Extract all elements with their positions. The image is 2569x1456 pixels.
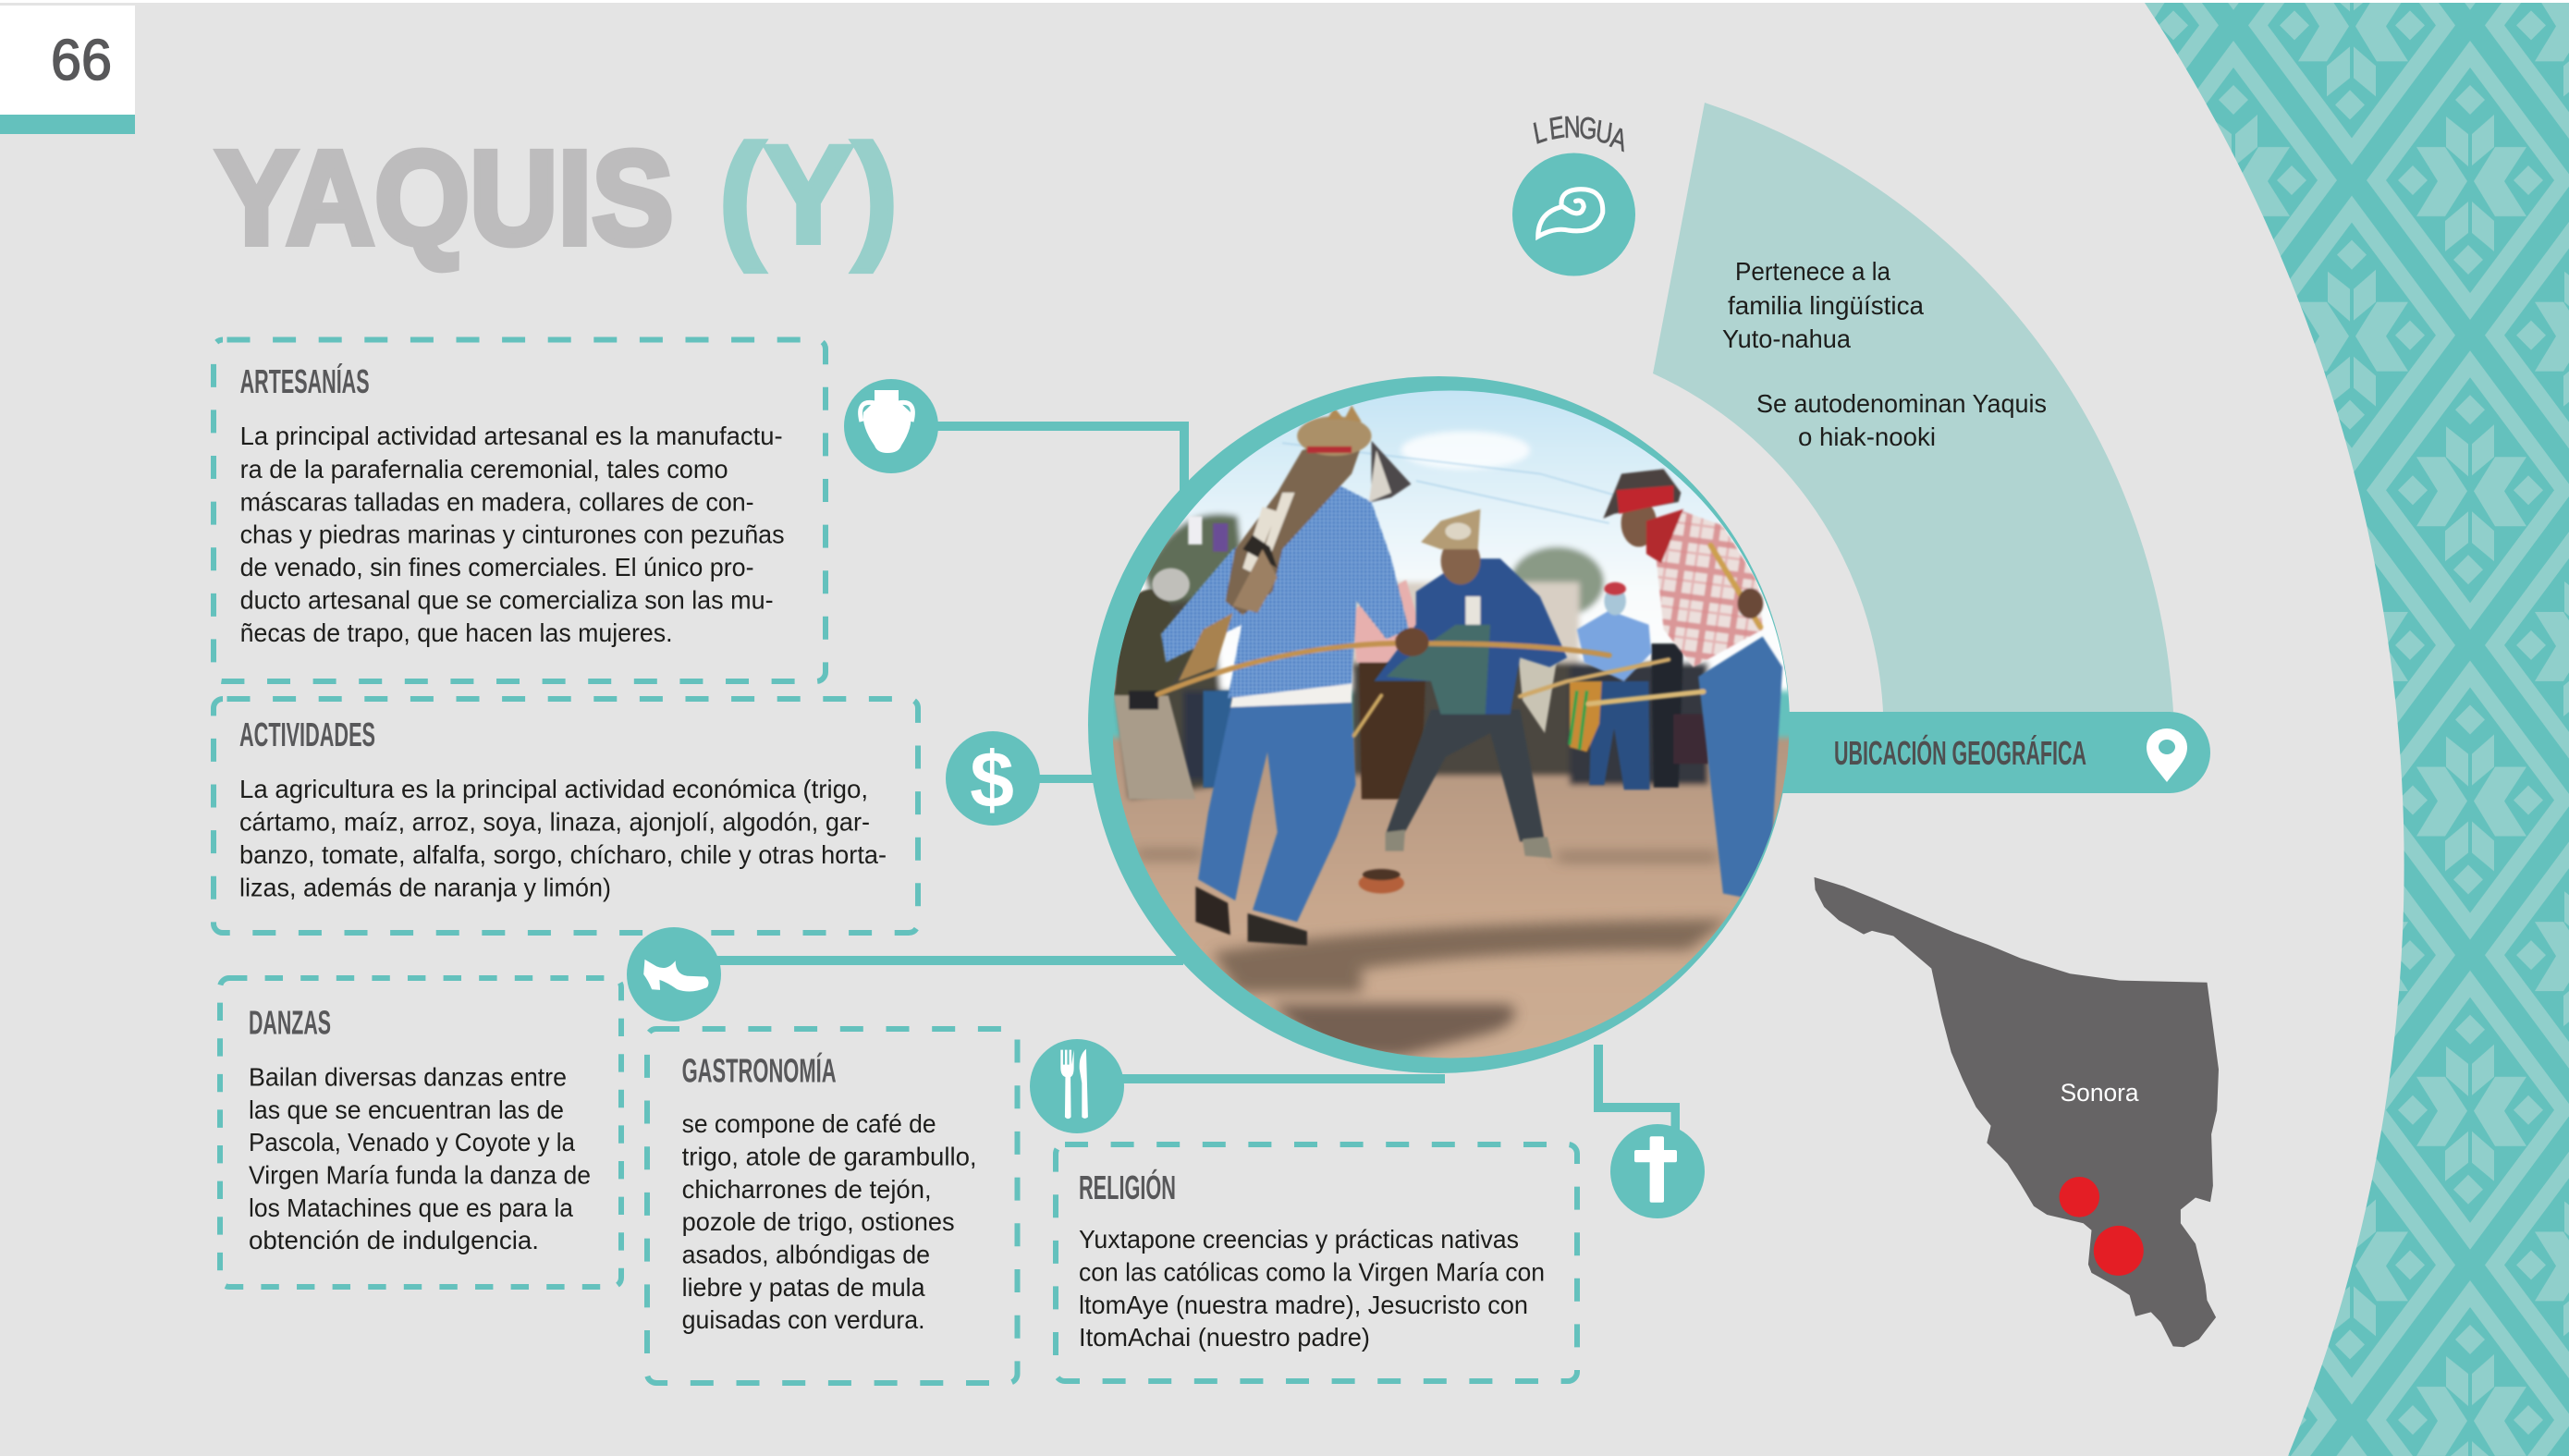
lengua text — [1722, 257, 2047, 451]
lengua fan panel — [1653, 103, 2173, 712]
lengua text: familia lingüística — [1728, 291, 1924, 320]
text: artesanías: La principal actividad artesanal es la manufactu- — [240, 422, 783, 450]
title: YAQUIS — [216, 124, 673, 272]
title — [216, 116, 898, 272]
text: actividades — [239, 775, 887, 902]
icon: fork and knife — [1030, 1039, 1124, 1133]
panel: actividades — [214, 699, 918, 933]
text: actividades: banzo, tomate, alfalfa, sorgo, chícharo, chile y otras horta- — [239, 840, 887, 869]
text: gastronomía: liebre y patas de mula — [682, 1273, 925, 1302]
ubicación geográfica bar: UBICACIÓN GEOGRÁFICA — [1834, 733, 2086, 772]
text: actividades: La agricultura es la principal actividad económica (trigo, — [239, 775, 868, 803]
heading: artesanías: ARTESANÍAS — [240, 362, 370, 400]
lengua heading: LENGUA — [1531, 111, 1630, 159]
lengua text: Pertenece a la — [1735, 257, 1890, 286]
text: actividades: cártamo, maíz, arroz, soya, linaza, ajonjolí, algodón, gar- — [239, 808, 870, 836]
text: danzas: los Matachines que es para la — [249, 1193, 573, 1222]
heading: religión: RELIGIÓN — [1079, 1168, 1176, 1206]
text: danzas — [249, 1063, 591, 1254]
text: artesanías: ñecas de trapo, que hacen las mujeres. — [240, 618, 673, 647]
map markers — [2060, 1177, 2144, 1276]
heading: danzas: DANZAS — [249, 1004, 331, 1041]
decorative woven pattern band — [2126, 0, 2569, 1456]
icon: lengua speech scroll — [1512, 153, 1635, 275]
centre dancer — [1387, 710, 1545, 841]
panel: artesanías — [214, 340, 826, 681]
panel: gastronomía — [647, 1029, 1017, 1383]
heading: actividades: ACTIVIDADES — [239, 716, 375, 753]
text: artesanías: ra de la parafernalia ceremonial, tales como — [240, 455, 728, 483]
text: gastronomía: chicharrones de tejón, — [682, 1175, 932, 1204]
text: danzas: obtención de indulgencia. — [249, 1226, 539, 1254]
lengua text: Yuto-nahua — [1722, 324, 1851, 353]
sticks — [1157, 545, 1760, 736]
text: gastronomía: trigo, atole de garambullo, — [682, 1143, 977, 1170]
text: artesanías: máscaras talladas en madera, collares de con- — [240, 488, 754, 516]
map label: Sonora — [2061, 1079, 2140, 1107]
central photo: Yaqui dancers — [1113, 390, 1790, 1058]
text: artesanías: chas y piedras marinas y cinturones con pezuñas — [240, 520, 785, 549]
icon: jar — [844, 379, 938, 473]
text: artesanías: ducto artesanal que se comercializa son las mu- — [240, 586, 774, 614]
text: religión: con las católicas como la Virgen María con — [1079, 1257, 1545, 1287]
lengua text: Se autodenominan Yaquis — [1756, 389, 2047, 418]
text: artesanías: de venado, sin fines comerciales. El único pro- — [240, 553, 754, 581]
text: artesanías — [240, 422, 785, 647]
right dancer — [1698, 636, 1782, 899]
text: gastronomía — [682, 1109, 977, 1334]
lengua text: o hiak-nooki — [1798, 422, 1936, 451]
ubicación geográfica bar — [1738, 712, 2210, 793]
panel: religión — [1056, 1144, 1577, 1381]
left dancer — [1198, 700, 1355, 922]
text: religión: Yuxtapone creencias y prácticas nativas — [1079, 1225, 1519, 1254]
text: danzas: Bailan diversas danzas entre — [249, 1063, 567, 1091]
icon: dollar sign — [946, 731, 1040, 826]
icon: cross — [1610, 1124, 1705, 1218]
icon: shoe — [627, 927, 721, 1022]
map: Sonora — [1814, 877, 2219, 1347]
text: gastronomía: guisadas con verdura. — [682, 1305, 925, 1334]
text: gastronomía: pozole de trigo, ostiones — [682, 1207, 955, 1236]
text: gastronomía: se compone de café de — [682, 1109, 936, 1138]
text: danzas: Pascola, Venado y Coyote y la — [249, 1128, 575, 1156]
text: gastronomía: asados, albóndigas de — [682, 1241, 930, 1268]
text: danzas: las que se encuentran las de — [249, 1095, 564, 1124]
icon: dollar sign: $ — [970, 736, 1014, 825]
panel: danzas — [220, 978, 621, 1287]
connectors to central photo — [712, 422, 1680, 1132]
title: (Y) — [719, 116, 898, 272]
text: religión: ItomAchai (nuestro padre) — [1079, 1323, 1370, 1352]
text: religión — [1079, 1225, 1545, 1352]
text: religión: ltomAye (nuestra madre), Jesucristo con — [1079, 1291, 1528, 1319]
icon: location pin — [2147, 728, 2187, 782]
page number tab — [0, 6, 135, 134]
text: actividades: lizas, además de naranja y limón) — [239, 873, 611, 902]
central photo ring — [1088, 376, 1790, 1073]
page number tab: 66 — [51, 29, 112, 92]
heading: gastronomía: GASTRONOMÍA — [682, 1052, 837, 1089]
text: danzas: Virgen María funda la danza de — [249, 1161, 591, 1189]
